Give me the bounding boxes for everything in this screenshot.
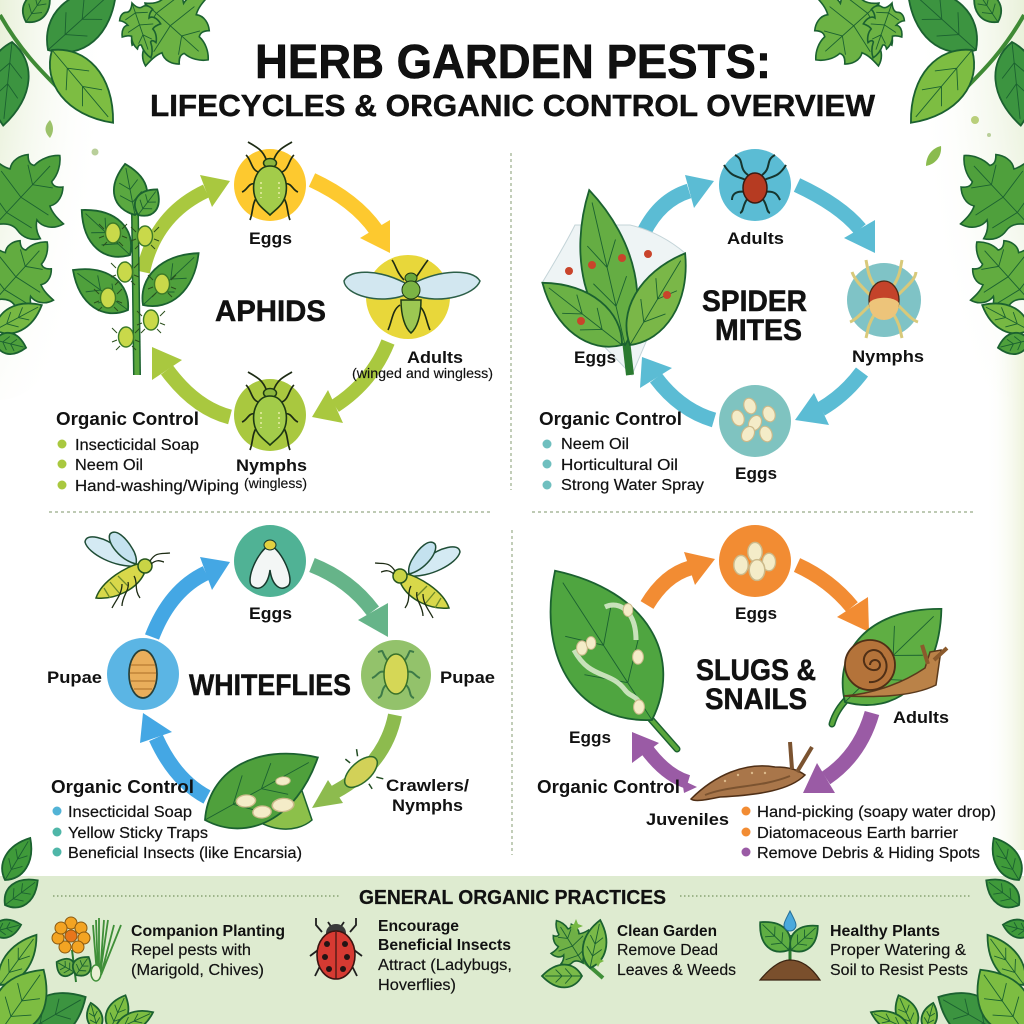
stage: nymphs: (wingless): [244, 475, 307, 491]
right edge speckle tint: [985, 350, 1024, 850]
panel: aphids: [56, 142, 493, 495]
stage: eggs: [234, 142, 306, 248]
organic control list: aphids: Hand-washing/Wiping: [75, 478, 239, 495]
label: crawlers nymphs: Crawlers/: [386, 776, 469, 795]
stage: eggs: [234, 525, 306, 623]
stage: eggs: Eggs: [735, 604, 777, 623]
icon: leaf with eggs: [190, 730, 333, 848]
text: companion planting: Repel pests with: [131, 942, 251, 959]
text: beneficial insects: Attract (Ladybugs,: [378, 957, 512, 974]
stage: eggs: Eggs: [249, 604, 292, 623]
organic control list: spider mites: Neem Oil: [561, 436, 629, 453]
text: beneficial insects: Beneficial Insects: [378, 937, 511, 954]
stage: pupae: [47, 638, 179, 710]
foliage: top right corner: [785, 0, 1024, 137]
organic control list: aphids: Organic Control: [56, 409, 199, 429]
stage: eggs: Eggs: [735, 464, 777, 483]
organic control list: slugs and snails: [537, 777, 996, 862]
text: clean garden: Leaves & Weeds: [617, 962, 736, 979]
text: beneficial insects: Hoverflies): [378, 977, 456, 994]
title: LIFECYCLES & ORGANIC CONTROL OVERVIEW: [150, 88, 876, 123]
left corner glow: [0, 0, 110, 400]
icon: marigold and chives: [52, 917, 121, 982]
foliage: right side sprigs: [926, 116, 1024, 358]
organic control list: aphids: [56, 409, 239, 495]
heading: spider mites: SPIDER: [702, 285, 807, 318]
heading: slugs and snails: SLUGS &: [696, 654, 816, 687]
stage: eggs: Eggs: [249, 229, 292, 248]
stage: nymphs: Nymphs: [236, 456, 307, 475]
organic control list: whiteflies: [51, 777, 302, 862]
foliage: bottom right corner: [867, 832, 1024, 1024]
icon: snail on leaf: [820, 583, 966, 728]
organic control list: spider mites: Horticultural Oil: [561, 457, 678, 474]
heading: spider mites: MITES: [715, 314, 802, 347]
foliage: top left corner: [0, 0, 239, 137]
text: beneficial insects: [378, 918, 512, 994]
aphids lifecycle arrows: [143, 175, 390, 423]
stage: nymphs: Nymphs: [852, 347, 924, 366]
stage: nymphs: [234, 372, 307, 491]
label: eggs on leaf: Eggs: [569, 728, 611, 747]
stage: adults: [719, 149, 791, 248]
title: HERB GARDEN PESTS:: [255, 36, 771, 89]
panel: general organic practices: [0, 876, 1024, 1024]
text: healthy plants: Healthy Plants: [830, 923, 940, 940]
whiteflies lifecycle arrows: [140, 557, 395, 808]
heading: slugs and snails: [696, 654, 816, 716]
stage: adults: [344, 255, 493, 381]
organic control list: whiteflies: Beneficial Insects (like Encarsia): [68, 845, 302, 862]
organic control list: whiteflies: Yellow Sticky Traps: [68, 825, 208, 842]
panel: slugs and snails: [515, 525, 996, 862]
text: companion planting: Companion Planting: [131, 923, 285, 940]
icon: clean garden leaves: [538, 909, 611, 987]
panel: whiteflies: [47, 525, 495, 862]
organic control list: spider mites: Strong Water Spray: [561, 477, 704, 494]
stage: adults: (winged and wingless): [352, 365, 493, 381]
icon: ladybug: [310, 918, 362, 979]
icon: leaf with slime trails and eggs: [515, 545, 692, 749]
dividers: [49, 153, 975, 855]
label: adults: Adults: [893, 708, 949, 727]
icon: crawler nymph: [333, 744, 389, 800]
text: healthy plants: [830, 923, 968, 979]
organic control list: slugs and snails: Organic Control: [537, 777, 680, 797]
text: companion planting: (Marigold, Chives): [131, 962, 264, 979]
label: juveniles: Juveniles: [646, 810, 729, 829]
icon: flying whitefly left: [85, 532, 170, 608]
icon: flying whitefly right: [375, 542, 460, 618]
organic control list: spider mites: [539, 409, 704, 494]
organic control list: spider mites: Organic Control: [539, 409, 682, 429]
organic control list: slugs and snails: Remove Debris & Hiding Spots: [757, 845, 980, 862]
title: [150, 36, 876, 123]
organic control list: whiteflies: Insecticidal Soap: [68, 804, 192, 821]
icon: infested herb plant: [62, 161, 211, 375]
foliage: left side sprigs: [0, 120, 98, 358]
heading: slugs and snails: SNAILS: [705, 683, 807, 716]
icon: slug: [691, 742, 812, 800]
stage: nymphs: [847, 260, 924, 366]
foliage: bottom left corner: [0, 832, 157, 1024]
label: eggs on plant: Eggs: [574, 348, 616, 367]
text: companion planting: [131, 923, 285, 979]
heading: aphids: APHIDS: [215, 295, 326, 328]
stage: nymph pupae: [361, 640, 495, 710]
text: healthy plants: Proper Watering &: [830, 942, 967, 959]
panel: spider mites: [529, 149, 924, 494]
label: crawlers nymphs: [386, 776, 469, 815]
stage: adults: Adults: [407, 348, 463, 367]
right corner glow: [914, 0, 1024, 400]
organic control list: whiteflies: Organic Control: [51, 777, 194, 797]
heading: spider mites: [702, 285, 807, 347]
heading: general practices: GENERAL ORGANIC PRACTICES: [359, 887, 666, 909]
text: healthy plants: Soil to Resist Pests: [830, 962, 968, 979]
text: beneficial insects: Encourage: [378, 918, 459, 935]
organic control list: slugs and snails: Diatomaceous Earth barrier: [757, 825, 958, 842]
icon: webbed herb plant: [529, 184, 704, 375]
organic control list: aphids: Insecticidal Soap: [75, 437, 199, 454]
text: clean garden: [617, 923, 736, 979]
slugs lifecycle arrows: [632, 552, 872, 793]
stage: eggs: [719, 525, 791, 623]
heading: whiteflies: WHITEFLIES: [189, 669, 351, 702]
stage: eggs: [719, 385, 791, 483]
label: crawlers nymphs: Nymphs: [392, 796, 463, 815]
spider mites lifecycle arrows: [640, 175, 875, 425]
text: clean garden: Remove Dead: [617, 942, 718, 959]
stage: adults: Adults: [727, 229, 784, 248]
organic control list: aphids: Neem Oil: [75, 457, 143, 474]
icon: healthy seedling with soil and drop: [751, 911, 825, 980]
stage: pupae: Pupae: [47, 668, 102, 687]
text: clean garden: Clean Garden: [617, 923, 717, 940]
stage: nymph pupae: Pupae: [440, 668, 495, 687]
organic control list: slugs and snails: Hand-picking (soapy water drop): [757, 804, 996, 821]
